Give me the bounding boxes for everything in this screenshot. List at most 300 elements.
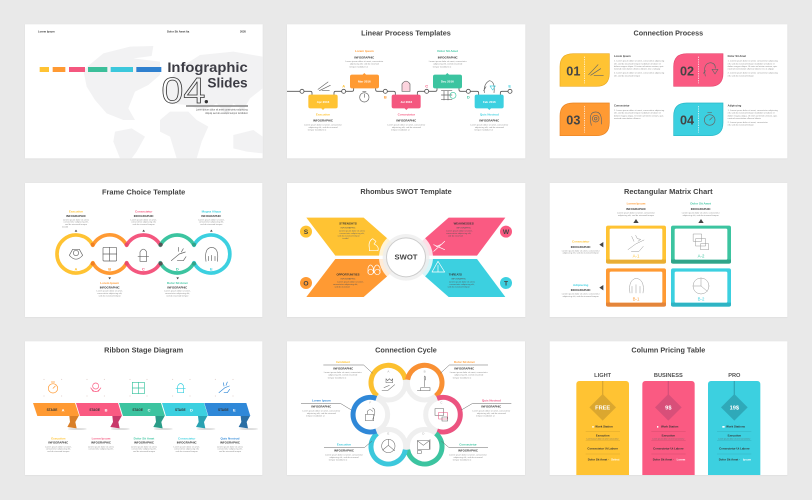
ribbon bands [33,403,250,416]
stage captions: consectetur adipiscing elit, [174,448,200,451]
step captions: Quis Nostrud [480,113,499,117]
stage labels: STAGE [89,408,100,412]
matrix labels [633,254,705,302]
stage captions: Lorem ipsum dolor sit amet, [217,445,244,448]
panel: rectangular matrix chart [550,183,787,317]
SWOT centre: SWOT [395,253,418,262]
captions: adipiscing elit, sed do eiusmod tempor [563,295,599,298]
SWOT texts: consectetur adipiscing elit, [446,232,472,235]
item texts: dolore magna aliqua. Ut enim ad minim veniam, quis [728,114,777,117]
pointers [75,230,213,279]
colour bars [40,67,161,72]
captions: Lorem ipsum dolor sit amet, [131,218,157,221]
header texts: Lorem Ipsum [38,30,55,34]
small row notes: Lorem ipsum dolor sit amet consectetur [652,437,685,440]
stage icons [48,382,230,394]
cycle captions: INFOGRAPHIC [334,449,354,453]
item texts: elit, sed do eiusmod tempor incididunt ut labore et [614,62,661,65]
ring letters [369,369,443,436]
stage captions: Lorem Ipsum [92,436,111,440]
pale ring tracks [353,365,460,464]
timeline [287,87,512,96]
plan rows: Dolor Sit Amet - [719,458,740,462]
captions: consectetur adipiscing elit, [165,292,190,295]
SWOT texts: INFOGRAPHIC [341,226,356,229]
matrix labels: B-1 [633,297,640,302]
item texts: 2. Lorem ipsum dolor sit amet, consectetur adipiscing [614,72,665,75]
item texts: dolore magna aliqua. Ut enim ad minim veniam, quis [614,65,663,68]
stage labels: STAGE [175,408,186,412]
panel: ribbon stage diagram [25,341,262,475]
step captions: adipiscing elit, sed do eiusmod [433,63,463,66]
plan names: LIGHT [594,373,612,379]
captions: Dolor Sit Amet [690,202,711,206]
stage captions: INFOGRAPHIC [91,441,111,445]
SWOT texts [333,221,476,289]
stage captions: Consectetur [178,436,196,440]
plan rows [587,425,752,462]
captions: Lorem ipsum dolor sit amet, [97,290,123,293]
SWOT shapes [306,218,505,297]
SWOT texts: sed do eiusmod tempor [338,234,360,237]
subtitle: Aliquip sed do eiusmod tempor incididunt [205,112,248,115]
step captions: INFOGRAPHIC [354,55,374,59]
cycle captions: adipiscing elit, sed do eiusmod [477,412,507,415]
world map [83,46,263,158]
item texts: nostrud exercitation ullamco laboris nisi ut aliquip [728,68,775,71]
item texts: elit, sed do eiusmod tempor incididunt ut labore et [614,112,661,115]
item texts: 1. Lorem ipsum dolor sit amet, consectetur adipiscing [728,60,779,63]
linked rings [57,235,230,273]
plan rows: Lorem [677,458,686,462]
stage labels: D [190,407,193,412]
step captions: Lorem Ipsum [355,49,374,53]
SWOT icons [368,239,445,275]
captions: sed do eiusmod tempor [99,294,121,297]
step captions: Lorem ipsum dolor sit amet, consectetur [470,123,509,126]
heading: Slides [207,76,248,91]
stage captions: Dolor Sit Amet [134,436,154,440]
plan names: BUSINESS [654,373,683,379]
stage labels: B [105,407,108,412]
ring letters: D [422,432,425,436]
stage captions: INFOGRAPHIC [220,441,240,445]
stage captions: Execution [51,436,66,440]
plan names [594,373,741,379]
panel: connection process [550,24,787,158]
plan rows: Execution [728,433,741,437]
item texts: dolore magna aliqua. Ut enim ad minim veniam, quis [728,65,777,68]
SWOT texts: Lorem ipsum dolor sit amet, [339,230,366,233]
step captions: Consectetur [398,113,416,117]
captions: incidid [62,227,69,229]
leaf 04: 04 [680,114,694,128]
SWOT texts: WEAKNESSES [454,221,474,225]
cycle captions: Lorem Ipsum [312,399,331,403]
cycle captions [302,360,511,462]
stage captions: consectetur adipiscing elit, [218,448,243,451]
header texts: Dolor Sit Amet Ita [167,30,190,34]
ring letters: A [75,266,78,271]
item texts: elit, sed do eiusmod tempor incididunt ut labore et [728,62,775,65]
cycle captions: tempor incididunt ut [306,415,325,418]
captions: Lorem ipsum dolor sit amet, consectetur [562,249,600,252]
stage labels: STAGE [218,408,229,412]
ring letters: C [440,401,443,405]
step captions: tempor incididunt ut [474,129,493,132]
title: Column Pricing Table [631,345,705,354]
ring letters: E [210,266,213,271]
captions [562,202,720,298]
SWOT texts: INFOGRAPHIC [451,277,467,280]
captions: adipiscing elit, sed do eiusmod tempor [618,214,654,217]
cycle captions: tempor incididunt ut [328,376,347,379]
captions: adipiscing elit, sed do eiusmod tempor [683,214,719,217]
SWOT texts: STRENGHTS [339,221,357,225]
row separators [586,432,751,454]
step captions: tempor incididunt ut [349,65,368,68]
price tags [589,381,748,421]
date tabs: Mar 2016 [358,79,371,83]
matrix labels: A-1 [633,254,640,259]
plan rows: Work Stations [726,425,746,429]
captions: INFOGRAPHIC [691,207,711,211]
captions: INFOGRAPHIC [626,207,646,211]
cycle captions: INFOGRAPHIC [481,405,501,409]
cycle captions: Lorem ipsum dolor sit amet, consectetur [449,453,487,456]
step captions: Lorem ipsum dolor sit amet, consectetur [387,123,426,126]
cycle captions: Lorem ipsum dolor sit amet, consectetur [472,409,511,412]
step letters [342,84,511,100]
captions: adipiscing elit, sed do eiusmod tempor [563,252,599,255]
date tabs: Apr 2016 [317,100,330,104]
step letters: C [425,84,428,89]
heading [161,60,248,111]
step captions: Lorem ipsum dolor sit amet, consectetur [345,60,384,63]
small row notes: Lorem ipsum dolor sit amet consectetur [718,437,751,440]
plan rows: Execution [596,433,610,437]
plan columns [576,381,760,475]
cycle captions: adipiscing elit, sed do eiusmod [454,374,484,377]
stage captions: Quis Nostrud [221,436,240,440]
SWOT badges: W [503,229,510,236]
cycle captions: Consectetur [459,443,478,447]
captions: INFOGRAPHIC [100,285,120,289]
cycle captions: tempor incididunt ut [476,415,495,418]
captions: Execution [69,210,83,214]
stage captions: Lorem ipsum dolor sit amet, [131,445,158,448]
leaf 01: 01 [566,64,580,78]
plan rows: Consectetur Ut Labore [587,447,618,451]
stage captions: sed do eiusmod tempor [133,450,155,453]
SWOT texts: consectetur adipiscing elit, [450,283,475,286]
matrix icons [628,234,709,294]
plan rows: Dolor Sit Amet - [588,458,609,462]
captions: sed do eiusmod tempor [65,223,87,226]
ribbon shadows [68,428,258,430]
ring letters [75,266,213,271]
item texts: 1. Lorem ipsum dolor sit amet, consectetur adipiscing [728,109,779,112]
captions: Lorem ipsum dolor sit amet, [164,290,191,293]
step letters: B [384,95,387,100]
captions: Lorem Ipsum [627,202,646,206]
item texts: elit, sed do eiusmod tempor [614,74,640,77]
stage captions: sed do eiusmod tempor [47,450,70,453]
heading: Infographic [167,60,248,75]
captions: INFOGRAPHIC [134,214,154,218]
matrix labels: A-2 [698,254,705,259]
cycle captions: adipiscing elit, sed do eiusmod [454,456,483,459]
captions: INFOGRAPHIC [167,285,187,289]
subtitle [186,105,248,115]
ring letters: A [387,369,389,373]
cycle captions: INFOGRAPHIC [454,366,474,370]
cycle captions: Lorem ipsum dolor sit amet, consectetur [302,409,341,412]
step captions: INFOGRAPHIC [438,55,458,59]
small row notes: Lorem ipsum dolor sit amet consectetur [587,437,619,440]
pointers [599,219,704,290]
step captions: INFOGRAPHIC [313,119,333,123]
cycle captions: Lorem ipsum dolor sit amet, consectetur [325,453,363,456]
item texts: elit, sed do eiusmod tempor [728,124,754,127]
SWOT texts: incidid [342,238,349,240]
header texts: 2020 [240,30,246,34]
ring letters: D [176,266,179,271]
step captions: Execution [316,113,330,117]
stage labels [47,407,236,412]
captions: INFOGRAPHIC [571,288,591,292]
plan rows: Consectetur Ut Labore [719,447,750,451]
item texts: elit, sed do eiusmod tempor incididunt ut labore et [728,112,775,115]
coloured arcs [353,365,460,464]
title: Frame Choice Template [102,187,185,196]
cycle captions: tempor incididunt ut [329,459,348,462]
stage captions: INFOGRAPHIC [134,441,154,445]
title: Rhombus SWOT Template [360,187,452,196]
cycle captions: tempor incididunt ut [453,376,472,379]
panel: column pricing table [550,341,787,475]
SWOT texts: Lorem ipsum dolor sit amet, [337,281,364,284]
leaf 02 [674,54,723,86]
SWOT texts: consectetur adipiscing elit, [340,232,365,235]
cycle captions: INFOGRAPHIC [458,449,478,453]
date tabs: Jul 2016 [400,100,413,104]
captions: Lorem ipsum dolor sit amet, [63,218,90,221]
cycle captions: adipiscing elit, sed do eiusmod [307,412,337,415]
step captions: tempor incididunt ut [433,65,452,68]
stage labels: C [148,407,151,412]
step captions: Lorem ipsum dolor sit amet, consectetur [429,60,467,63]
step captions: Lorem ipsum dolor sit amet, consectetur [304,123,342,126]
step captions: INFOGRAPHIC [396,119,416,123]
captions: sed do eiusmod tempor [200,223,223,226]
SWOT badges: T [504,280,508,287]
captions: Dolor Sit Amet [167,281,188,285]
captions: consectetur adipiscing elit, [131,221,157,224]
title: Connection Cycle [375,345,437,354]
panel: infographic slides cover [25,24,263,158]
captions [62,210,225,297]
heading: 04 [161,70,205,111]
captions: Adipiscing [573,283,588,287]
cycle captions: Dolor Sit Amet [454,360,475,364]
cycle captions: Lorem ipsum dolor sit amet, consectetur [324,371,362,374]
item texts: 1. Lorem ipsum dolor sit amet, consectetur adipiscing [614,109,665,112]
ring letters: B [108,266,111,271]
cycle captions: tempor incididunt ut [453,459,472,462]
captions: sed do eiusmod tempor [133,223,155,226]
plan rows: Work Station [595,425,613,429]
captions: consectetur adipiscing elit, [64,221,89,224]
small row notes [587,437,751,440]
line icons [318,81,495,102]
plan rows: Consectetur Ut Labore [653,447,684,451]
stage captions: sed do eiusmod tempor [219,450,241,453]
ring letters: E [387,432,389,436]
captions: Lorem ipsum dolor sit amet, [198,218,225,221]
item texts: 1. Lorem ipsum dolor sit amet, consectetur adipiscing [614,60,665,63]
stage captions: sed do eiusmod tempor [176,450,198,453]
cycle captions: INFOGRAPHIC [333,366,353,370]
captions: consectetur adipiscing elit, [199,221,224,224]
matrix labels: B-2 [698,297,705,302]
item texts: nostrud exercitation ullamco [614,117,641,120]
stage labels: E [233,407,236,412]
leaf 01 [560,54,609,86]
item texts: 2. Lorem ipsum dolor sit amet, consectetur [728,121,768,124]
captions: Lorem ipsum dolor sit amet, consectetur [562,293,600,296]
SWOT texts: consectetur adipiscing elit, [333,283,358,286]
item texts: elit, sed do eiusmod tempor [728,74,754,77]
item texts: Lorem Ipsum [614,54,631,58]
ribbon folds [67,416,250,428]
stage labels: STAGE [132,408,143,412]
subtitle: Lorem ipsum dolor sit amet consectetur adipiscing [196,109,248,112]
step captions [304,49,509,132]
captions: Lorem ipsum dolor sit amet, consectetur [682,212,720,215]
step captions: tempor incididunt ut [308,129,327,132]
item texts [614,54,779,127]
SWOT texts: sed do eiusmod tempor [448,286,470,289]
step letters: E [508,84,511,89]
date tabs: Feb 2016 [483,100,496,104]
captions: Consectetur [135,210,153,214]
stage captions: Lorem ipsum dolor sit amet, [174,445,200,448]
step letters: A [342,84,345,89]
step captions: adipiscing elit, sed do eiusmod [475,126,505,129]
price tags: 9$ [665,405,672,411]
item texts: Adipiscing [728,103,742,107]
item texts: dolore magna aliqua. Ut enim ad minim veniam, quis [614,114,663,117]
plan rows: Ipsum [743,458,752,462]
stage captions: consectetur adipiscing elit, [132,448,157,451]
stage labels: A [62,407,65,412]
cycle icons [365,376,448,453]
plan rows: Dolor Sit Amet - [653,458,674,462]
SWOT badges: S [304,229,309,236]
leader lines [301,365,511,447]
SWOT texts: Lorem ipsum dolor sit amet, [446,230,473,233]
matrix frames [606,226,731,307]
step captions: tempor incididunt ut [391,129,410,132]
leaf 04 [674,103,723,136]
captions: INFOGRAPHIC [571,245,591,249]
ring icons and letters [69,247,218,261]
leaf 02: 02 [680,64,694,78]
captions: INFOGRAPHIC [201,214,221,218]
SWOT badges: O [303,280,309,287]
step captions: INFOGRAPHIC [479,119,499,123]
cycle captions: Incididunt [336,360,350,364]
SWOT centre [379,230,433,284]
stage captions: Lorem ipsum dolor sit amet, [88,445,115,448]
leaf 03 [560,103,609,136]
SWOT texts: Lorem ipsum dolor sit amet, [449,281,476,284]
item texts: nostrud exercitation ullamco laboris nisi ut aliquip [614,68,661,71]
step captions: adipiscing elit, sed do eiusmod [350,63,380,66]
cycle captions: Execution [337,443,351,447]
SWOT texts: INFOGRAPHIC [341,277,356,280]
plan names: PRO [728,373,741,379]
stage captions [45,436,244,453]
item texts: Dolor Sit Amet [728,54,746,58]
leaf 03: 03 [566,114,580,128]
stage captions: Lorem ipsum dolor sit amet, [45,445,72,448]
captions: INFOGRAPHIC [66,214,86,218]
stage captions: INFOGRAPHIC [177,441,197,445]
panel: frame choice template [25,183,262,317]
item texts: nostrud exercitation ullamco laboris [728,117,761,120]
captions: Consectetur [572,240,590,244]
plan rows: Execution [662,433,675,437]
step captions: adipiscing elit, sed do eiusmod [392,126,422,129]
cycle captions: INFOGRAPHIC [311,405,331,409]
stage captions: consectetur adipiscing elit, [46,448,71,451]
stage labels: STAGE [47,408,57,412]
SWOT texts: THREATS [449,273,462,277]
panel: rhombus SWOT template [287,183,525,317]
panel: connection cycle [287,341,525,475]
captions: Magna Aliqua [202,210,221,214]
title: Rectangular Matrix Chart [624,187,713,196]
title: Linear Process Templates [361,29,451,38]
title: Ribbon Stage Diagram [104,345,184,354]
cycle captions: Quis Nostrud [482,399,501,403]
panel: linear process templates [287,24,525,158]
item texts: Consectetur [614,103,629,107]
captions: consectetur adipiscing elit, [97,292,123,295]
step captions: adipiscing elit, sed do eiusmod [309,126,338,129]
ring letters: B [424,369,426,373]
step letters: D [467,95,470,100]
SWOT texts: sed do eiusmod [334,287,350,289]
step captions: Dolor Sit Amet [437,49,458,53]
date tabs: Dec 2016 [441,79,454,83]
SWOT badges [300,226,512,289]
captions: sed do eiusmod tempor [166,294,189,297]
date tabs [308,73,504,110]
price tags: FREE [595,405,610,411]
corner marks [43,379,233,396]
title: Connection Process [633,29,703,38]
SWOT texts: OPPORTUNITIES [336,273,360,277]
header texts [38,30,246,34]
ring letters: F [369,401,371,405]
price tags: 19$ [730,405,740,411]
plan rows: Work Station [661,425,679,429]
ring letters: C [142,266,145,271]
item texts: 2. Lorem ipsum dolor sit amet, consectetur adipiscing [728,72,779,75]
